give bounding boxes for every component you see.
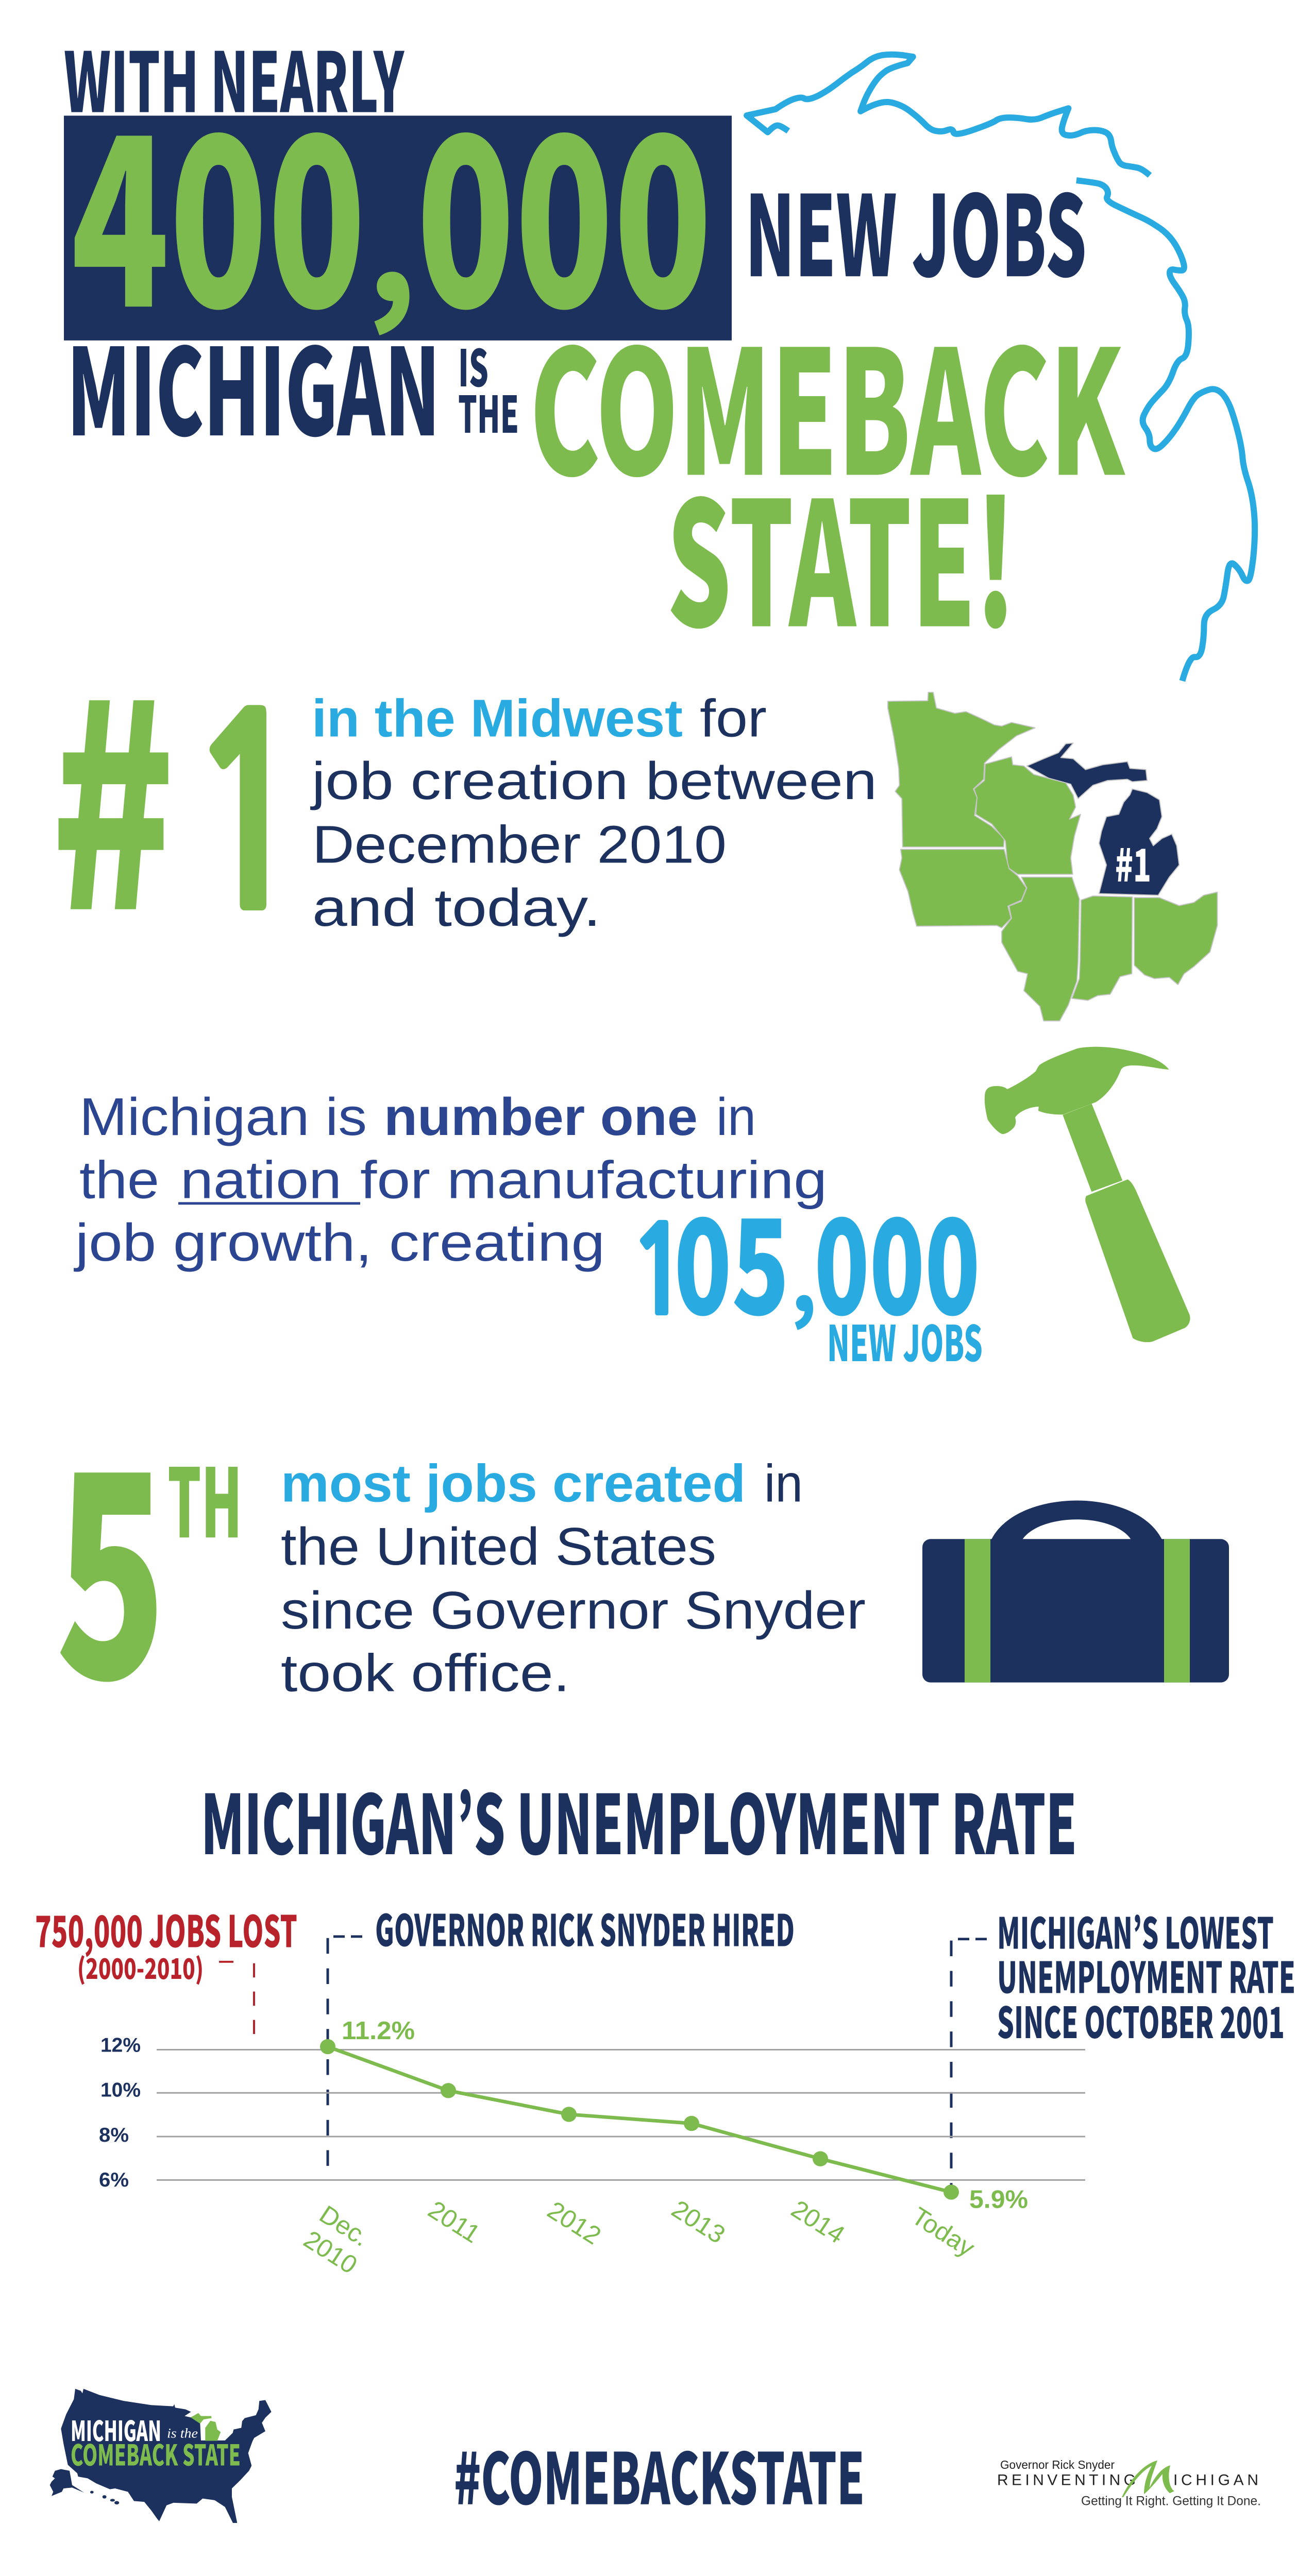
text block: most jobs created: in (764, 1454, 803, 1513)
heading: with nearly: WITH NEARLY (64, 17, 405, 136)
stat: 105,000 new jobs (628, 1162, 983, 1376)
text block: number one in the nation: in (716, 1088, 756, 1147)
stat: 5th: TH (167, 1427, 242, 1565)
text block: number one in the nation: Michigan is (79, 1088, 367, 1147)
text block: number one in the nation (74, 1088, 827, 1273)
banner: 400,000 (64, 33, 732, 375)
y-axis labels: 8% (99, 2124, 129, 2146)
panel: manufacturing job growth (74, 1047, 1190, 1376)
x-axis labels: Dec. (314, 2200, 374, 2252)
heading: is the (458, 328, 519, 448)
callout: lowest rate (951, 1899, 1295, 2189)
panel: unemployment chart (35, 1895, 1295, 2279)
banner: 400,000: 000 (416, 33, 712, 375)
text block: most jobs created: most jobs created (281, 1454, 746, 1513)
text block: most jobs created (281, 1454, 866, 1703)
logo: reinventing michigan (997, 2458, 1261, 2509)
y-axis labels: 12% (100, 2034, 141, 2056)
panel: number one in the midwest (50, 583, 1217, 1021)
stat: 105,000 new jobs: 1 (628, 1211, 691, 1332)
text block: number one in the nation: for manufacturing (360, 1150, 827, 1210)
stat: #1: # (50, 583, 175, 990)
callout: governor hired: GOVERNOR RICK SNYDER HIRED (375, 1895, 795, 1959)
text block: most jobs created: the United States (281, 1517, 716, 1577)
stat: 5th: 5 (56, 1350, 166, 1759)
panel: headline (64, 17, 1125, 676)
x-axis labels: 2012 (543, 2196, 606, 2250)
x-axis labels: 2010 (299, 2225, 362, 2279)
callout: jobs lost: 750,000 JOBS LOST (35, 1896, 297, 1960)
logo: reinventing michigan: Governor Rick Snyder (1000, 2458, 1115, 2472)
stat: #1: 1 (184, 686, 312, 947)
text block: midwest job creation: for (700, 689, 767, 748)
stat: 105,000 new jobs: 05 (674, 1162, 789, 1352)
logo: reinventing michigan: ICHIGAN (1173, 2472, 1258, 2488)
logo: reinventing michigan: Getting It Right. Getting It Done. (1081, 2495, 1261, 2509)
heading: is the: IS (458, 328, 488, 401)
map label: #1: #1 (1115, 830, 1151, 895)
icon: script m (1122, 2460, 1174, 2497)
line chart: unemployment trend: 11.2% (342, 2016, 415, 2045)
line chart: unemployment trend (320, 2016, 1028, 2213)
x-axis labels: 2013 (667, 2195, 730, 2249)
stat: 105,000 new jobs: , (791, 1218, 817, 1335)
logo: michigan is the comeback state: is the (167, 2426, 198, 2441)
x-axis labels: 2014 (786, 2195, 850, 2249)
text block: number one in the nation: nation (180, 1150, 342, 1210)
y-axis labels (99, 2034, 141, 2191)
text block: midwest job creation (310, 689, 877, 938)
logo: michigan is the comeback state (50, 2389, 272, 2523)
text block: number one in the nation: job growth, creating (74, 1213, 605, 1273)
logo: reinventing michigan: REINVENTING (997, 2472, 1136, 2488)
heading: state: STATE! (667, 427, 1016, 676)
text block: midwest job creation: in the Midwest (312, 689, 683, 748)
heading: is the: THE (458, 374, 519, 448)
callout: jobs lost (35, 1896, 297, 2041)
callout: jobs lost: (2000-2010) (77, 1946, 204, 1987)
icon: briefcase (922, 1500, 1229, 1683)
hashtag: #COMEBACKSTATE (454, 2422, 865, 2524)
y-axis labels: 6% (99, 2168, 129, 2191)
x-axis labels (299, 2195, 980, 2279)
icon: us map (50, 2389, 272, 2523)
text block: most jobs created: took office. (281, 1643, 570, 1703)
panel: fifth most jobs (56, 1350, 1229, 1759)
stat: 105,000 new jobs: 000 (814, 1162, 980, 1352)
y-axis labels: 10% (100, 2079, 141, 2102)
banner: 400,000: , (367, 132, 416, 344)
text block: midwest job creation: December 2010 (312, 815, 727, 874)
line chart: unemployment trend: 5.9% (969, 2185, 1028, 2213)
logo text: MICHIGAN (71, 2409, 161, 2449)
text block: number one in the nation: number one (384, 1088, 698, 1147)
stat: #1 (50, 583, 312, 990)
x-axis labels: Today (906, 2202, 980, 2262)
stat: 105,000 new jobs: NEW JOBS (827, 1304, 983, 1376)
map: midwest states (888, 692, 1217, 1021)
x-axis labels: 2011 (423, 2195, 485, 2248)
icon: michigan coastline outline (747, 55, 1255, 681)
text block: most jobs created: since Governor Snyder (281, 1581, 866, 1640)
heading: michigan: MICHIGAN (67, 297, 440, 470)
icon: hammer (985, 1047, 1190, 1342)
banner: 400,000: 400 (71, 33, 366, 375)
text block: number one in the nation: the (79, 1150, 159, 1210)
text block: midwest job creation: job creation between (310, 752, 877, 811)
text block: midwest job creation: and today. (312, 878, 601, 938)
logo: michigan is the comeback state: COMEBACK STATE (71, 2433, 241, 2474)
